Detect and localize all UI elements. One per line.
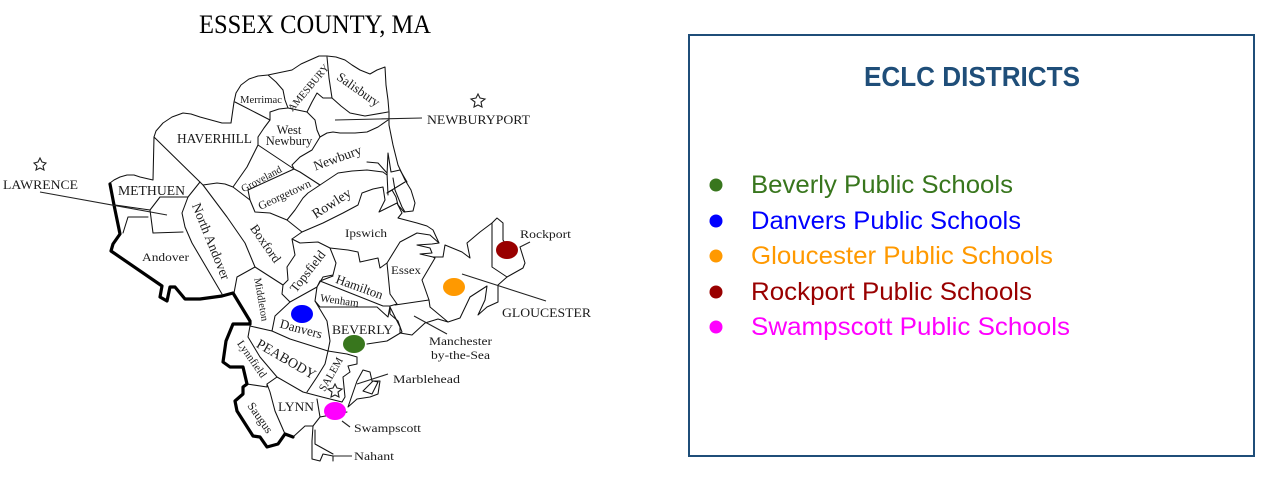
marker: Danvers [291,305,313,323]
label: Newbury (West): Newbury [266,134,313,148]
label: by-the-Sea: by-the-Sea [431,348,491,362]
label: Rowley: Rowley [310,186,354,222]
marker: Rockport [496,241,518,259]
label: Gloucester: GLOUCESTER [502,306,592,320]
town labels [3,62,592,463]
map: Essex County towns [3,56,592,463]
label: Lynnfield: Lynnfield [234,338,269,381]
legend: Rockport: Rockport Public Schools [751,278,1032,306]
label: Marblehead: Marblehead [393,372,460,386]
marker: Gloucester [443,278,465,296]
label: Wenham: Wenham [319,292,360,310]
panel border [689,35,1254,456]
label: Methuen: METHUEN [118,184,185,199]
label: Haverhill: HAVERHILL [177,131,252,146]
marker: Swampscott [324,402,346,420]
label: Essex: Essex [391,265,421,277]
leader lines [40,118,546,456]
label: Newbury: Newbury [311,142,364,173]
marker: Beverly [343,335,365,353]
star: Salem [328,384,342,397]
label: Manchester: Manchester [429,334,492,348]
label: Georgetown: Georgetown [257,178,313,213]
star: Lawrence [34,158,46,170]
district markers [291,241,518,420]
label: Newburyport: NEWBURYPORT [427,113,530,127]
legend: Danvers: Danvers Public Schools [751,207,1021,235]
label: Danvers: Danvers [278,316,324,342]
label: Groveland: Groveland [240,164,285,195]
label: Beverly: BEVERLY [332,322,394,337]
label: Lynn: LYNN [278,399,315,414]
label: Hamilton: Hamilton [334,271,386,302]
label: Ipswich: Ipswich [345,226,387,240]
legend: Gloucester: Gloucester Public Schools [751,242,1053,270]
label: Middleton: Middleton [251,277,270,323]
label: Rockport: Rockport [520,227,572,241]
panel: ECLC districts legend [689,35,1254,456]
map title: ESSEX COUNTY, MA [199,9,431,39]
label: Topsfield: Topsfield [286,247,329,295]
town boundaries [110,56,525,461]
label: Salem: SALEM [317,355,346,394]
label: Lawrence: LAWRENCE [3,177,78,192]
label: Peabody: PEABODY [253,337,318,383]
legend: Swampscott: Swampscott Public Schools [751,313,1070,341]
county border (heavy line) [110,184,293,447]
label: Salisbury: Salisbury [334,69,383,110]
label: Andover: Andover [142,250,189,264]
label: Boxford: Boxford [247,221,285,266]
legend: Beverly: Beverly Public Schools [751,171,1013,199]
label: West: West [277,123,302,137]
label: Merrimac: Merrimac [240,94,282,106]
label: Nahant: Nahant [354,449,395,463]
panel heading: ECLC DISTRICTS [864,61,1080,92]
label: Amesbury: AMESBURY [286,62,332,114]
star: Newburyport [471,94,485,107]
label: Swampscott: Swampscott [354,421,422,435]
label: North Andover: North Andover [189,201,234,282]
label: Saugus: Saugus [245,399,276,436]
